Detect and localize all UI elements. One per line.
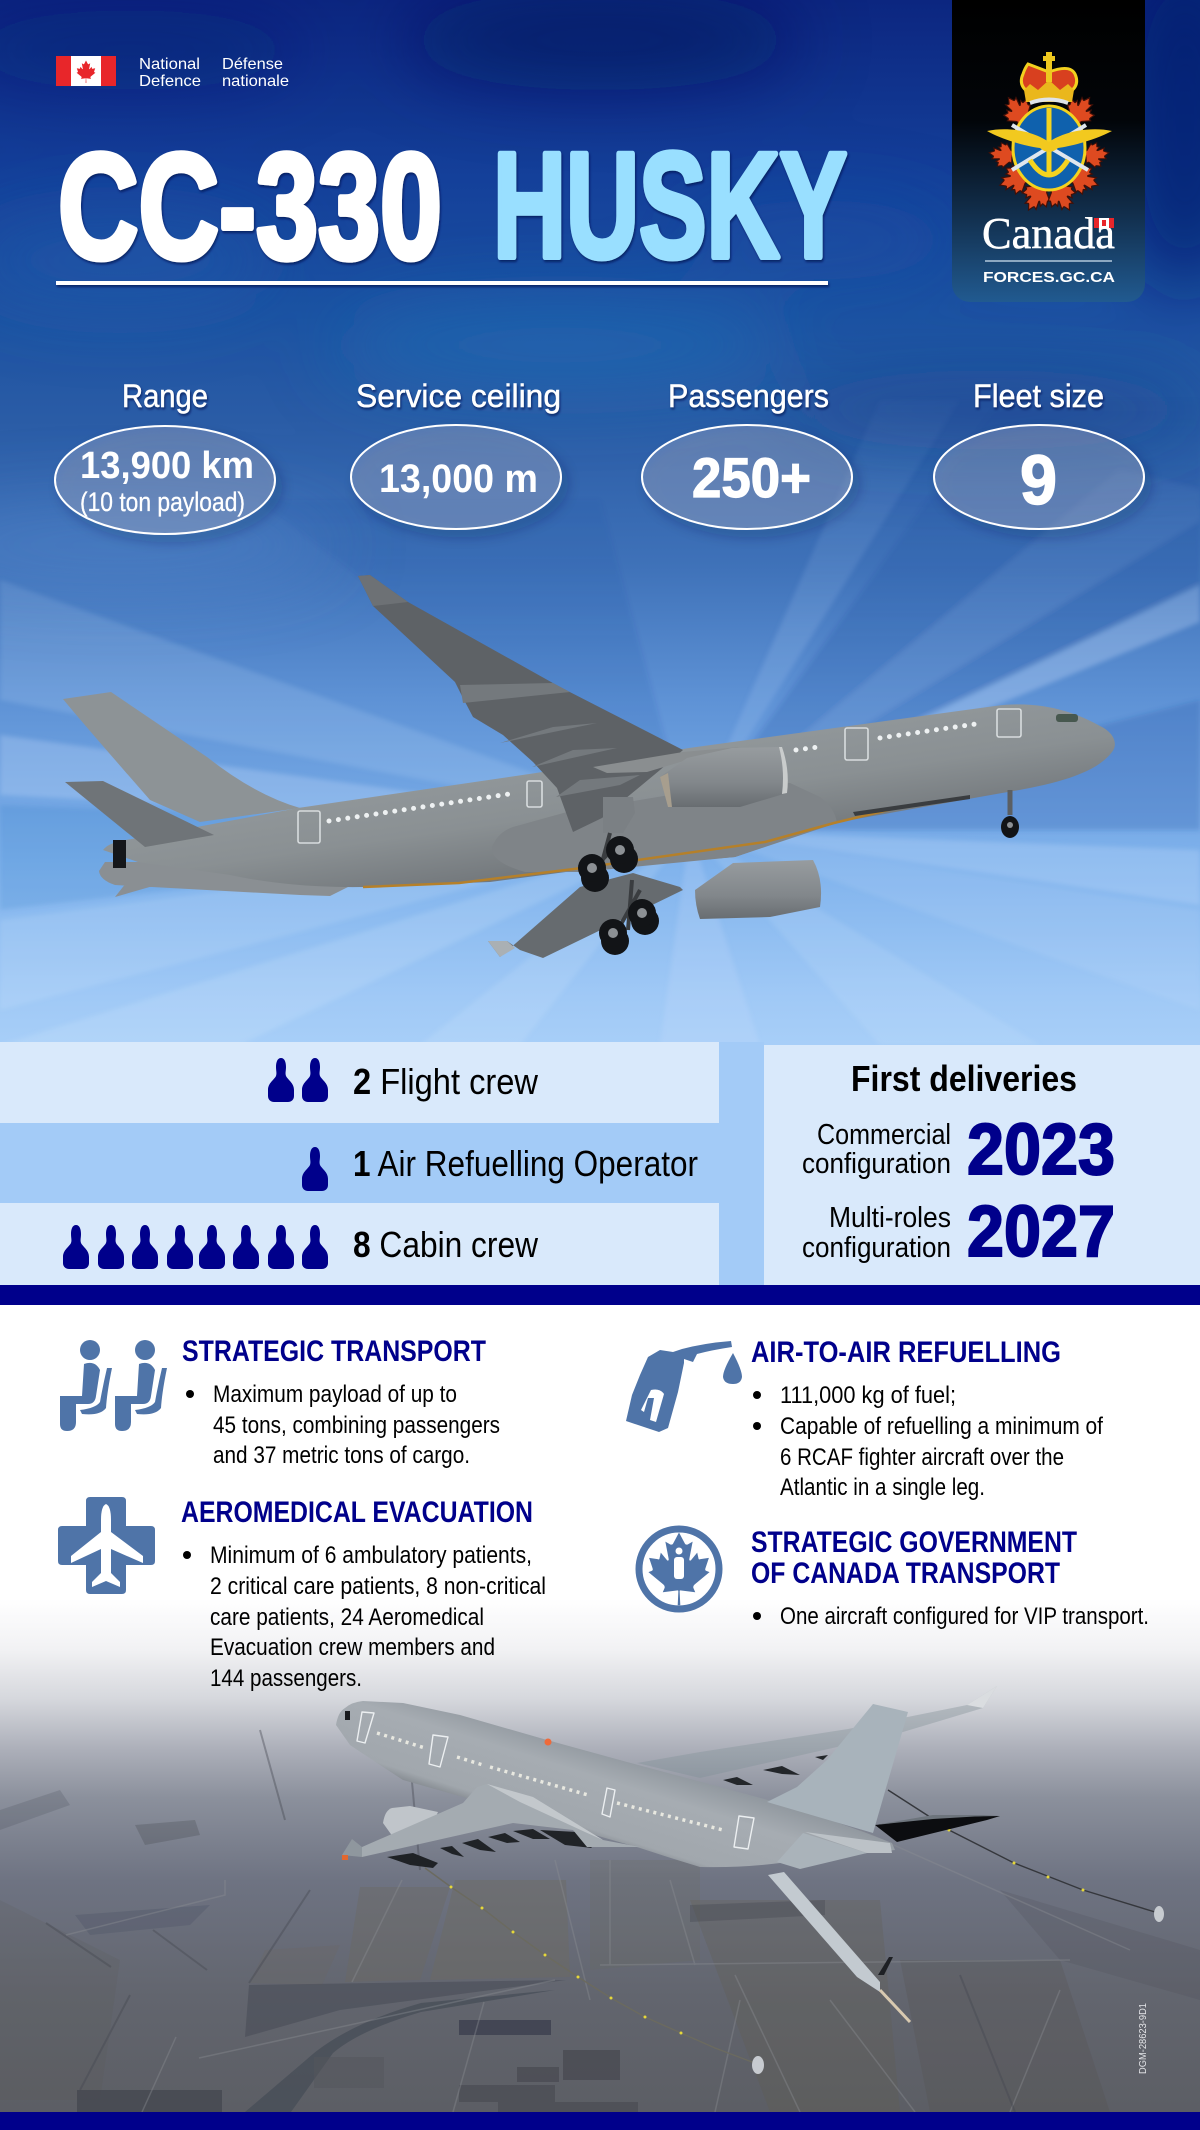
bullet list: Capable of refuelling a minimum of xyxy=(780,1413,1103,1440)
text: national defence wordmark: Defence xyxy=(139,73,201,90)
stat: passengers: Passengers xyxy=(668,378,829,414)
panel: first deliveries xyxy=(764,1045,1200,1285)
doors xyxy=(298,709,1021,843)
icon: canadian flag xyxy=(56,56,116,86)
stat: range xyxy=(55,378,275,534)
far engine xyxy=(695,860,821,919)
section: air-to-air refuelling xyxy=(626,1336,1103,1501)
delivery: multi-roles configuration 2027: configuration xyxy=(802,1232,951,1264)
delivery: commercial configuration 2023: configuration xyxy=(802,1148,951,1180)
cockpit window xyxy=(1056,714,1078,722)
bullet list xyxy=(186,1381,500,1469)
near wing xyxy=(362,1784,640,1857)
far wing xyxy=(488,873,683,958)
icon: canadian forces crest xyxy=(987,52,1112,217)
title: CC-330 xyxy=(58,122,442,290)
background: blue sky xyxy=(0,0,1200,1050)
bullet list: and 37 metric tons of cargo. xyxy=(213,1442,470,1469)
belly door xyxy=(853,795,970,816)
bullet list: 45 tons, combining passengers xyxy=(213,1412,500,1439)
icon: small flag xyxy=(1094,218,1114,228)
delivery: multi-roles configuration 2027: 2027 xyxy=(967,1192,1115,1272)
passenger windows xyxy=(377,1733,723,1830)
panel: cabin crew xyxy=(0,1203,719,1285)
panel: first deliveries: First deliveries xyxy=(851,1058,1077,1099)
stat: fleet size: Fleet size xyxy=(973,378,1104,414)
text: cabin crew: 8 Cabin crew xyxy=(353,1224,539,1265)
tail tip xyxy=(113,840,126,868)
stat: range: Range xyxy=(122,378,208,414)
text: forces.gc.ca: FORCES.GC.CA xyxy=(983,269,1115,286)
delivery: commercial configuration 2023 xyxy=(802,1110,1115,1190)
heading: AEROMEDICAL EVACUATION xyxy=(181,1496,533,1529)
delivery: multi-roles configuration 2027 xyxy=(802,1192,1115,1272)
section: aeromedical evacuation xyxy=(58,1496,546,1692)
bullet list: Evacuation crew members and xyxy=(210,1634,495,1661)
stat: service ceiling: 13,000 m xyxy=(379,457,538,501)
near stabiliser and tail cone xyxy=(777,1833,867,1869)
stat: fleet size: 9 xyxy=(1020,441,1057,519)
icon: medical cross with plane xyxy=(58,1497,155,1594)
text: air refuelling operator: 1 Air Refuelling Operator xyxy=(353,1143,698,1184)
cheatline xyxy=(363,806,905,887)
near engine xyxy=(383,1806,438,1840)
far wing xyxy=(637,1686,997,1778)
refuelling boom xyxy=(768,1872,910,2022)
stat: fleet size xyxy=(934,378,1144,529)
panel: flight crew xyxy=(0,1042,719,1123)
heading xyxy=(751,1526,1077,1590)
icon: fuel nozzle and drop xyxy=(626,1341,742,1432)
fuselage xyxy=(103,704,1115,887)
cockpit window xyxy=(345,1711,350,1720)
lower tail fairing xyxy=(99,862,352,897)
flap fairings xyxy=(460,683,640,797)
bullet list: 111,000 kg of fuel; xyxy=(780,1382,956,1409)
delivery: multi-roles configuration 2027: Multi-roles xyxy=(829,1202,951,1234)
delivery: commercial configuration 2023: Commercial xyxy=(817,1119,951,1151)
band: navy divider xyxy=(0,1285,1200,1305)
bullet list: Atlantic in a single leg. xyxy=(780,1474,985,1501)
national defence signature xyxy=(56,56,289,90)
row: air refuelling operator xyxy=(0,1123,719,1203)
text: national defence wordmark: National xyxy=(139,56,200,73)
bullet list: Minimum of 6 ambulatory patients, xyxy=(210,1542,532,1569)
text: national defence wordmark xyxy=(139,56,289,90)
passenger windows xyxy=(329,723,983,821)
near horizontal stabiliser xyxy=(65,781,214,847)
title xyxy=(56,121,847,290)
far stabiliser xyxy=(875,1816,1000,1842)
text: national defence wordmark: nationale xyxy=(222,73,289,90)
vertical tail xyxy=(63,692,300,822)
text: flight crew: 2 Flight crew xyxy=(353,1061,539,1102)
pylon xyxy=(593,747,740,773)
aircraft: side view from below xyxy=(63,575,1115,958)
stat: range: (10 ton payload) xyxy=(80,487,245,517)
text: national defence wordmark: Défense xyxy=(222,56,283,73)
icon: eight cabin crew xyxy=(63,1225,328,1269)
heading: STRATEGIC GOVERNMENT xyxy=(751,1526,1077,1559)
flap fairings xyxy=(440,1829,592,1857)
text: document number: DGM-28623-9D1 xyxy=(1138,2003,1149,2074)
bullet list xyxy=(183,1542,546,1692)
bullet list: 144 passengers. xyxy=(210,1665,362,1692)
heading: OF CANADA TRANSPORT xyxy=(751,1557,1060,1590)
heading: STRATEGIC TRANSPORT xyxy=(182,1335,486,1368)
icon: two crew xyxy=(268,1058,328,1102)
stat: passengers: 250+ xyxy=(692,446,811,509)
far wing flap fairings xyxy=(723,1755,828,1785)
title: HUSKY xyxy=(493,121,847,289)
bullet list: One aircraft configured for VIP transport. xyxy=(780,1603,1149,1630)
fuselage xyxy=(336,1701,895,1867)
bullet list: care patients, 24 Aeromedical xyxy=(210,1604,484,1631)
vertical tail xyxy=(767,1704,908,1833)
section: strategic transport xyxy=(60,1335,500,1469)
lower section: white to aerial farmland xyxy=(0,1630,1200,2112)
engine pod under wing xyxy=(387,1853,438,1868)
stat: service ceiling: Service ceiling xyxy=(356,378,561,414)
belly fairing xyxy=(492,783,837,872)
hose: left wing xyxy=(425,1868,764,2074)
aerial farmland fields xyxy=(0,1730,1200,2112)
beacon light xyxy=(544,1738,552,1746)
heading: AIR-TO-AIR REFUELLING xyxy=(751,1336,1061,1369)
icon: maple leaf in circle xyxy=(639,1529,719,1609)
stat: passengers xyxy=(642,378,852,529)
aircraft: air-to-air refuelling view xyxy=(336,1686,1164,2074)
icon: one operator xyxy=(302,1147,328,1191)
stat: service ceiling xyxy=(351,378,561,529)
bullet list: 2 critical care patients, 8 non-critical xyxy=(210,1573,546,1600)
doors xyxy=(357,1712,754,1849)
band: navy footer xyxy=(0,2112,1200,2130)
bullet list: Maximum payload of up to xyxy=(213,1381,457,1408)
hose: right wing xyxy=(888,1790,1164,1922)
panel: canadian forces logo xyxy=(952,0,1145,302)
near engine xyxy=(660,747,788,807)
landing gear xyxy=(578,790,1019,955)
bullet list xyxy=(753,1382,1103,1501)
delivery: commercial configuration 2023: 2023 xyxy=(967,1110,1115,1190)
stat: range: 13,900 km xyxy=(80,445,254,487)
near wing xyxy=(358,575,683,832)
text: canada wordmark: Canada xyxy=(982,209,1115,258)
icon: seated passengers xyxy=(60,1340,167,1431)
bullet list: 6 RCAF fighter aircraft over the xyxy=(780,1444,1064,1471)
section: strategic government of canada transport xyxy=(639,1526,1149,1630)
